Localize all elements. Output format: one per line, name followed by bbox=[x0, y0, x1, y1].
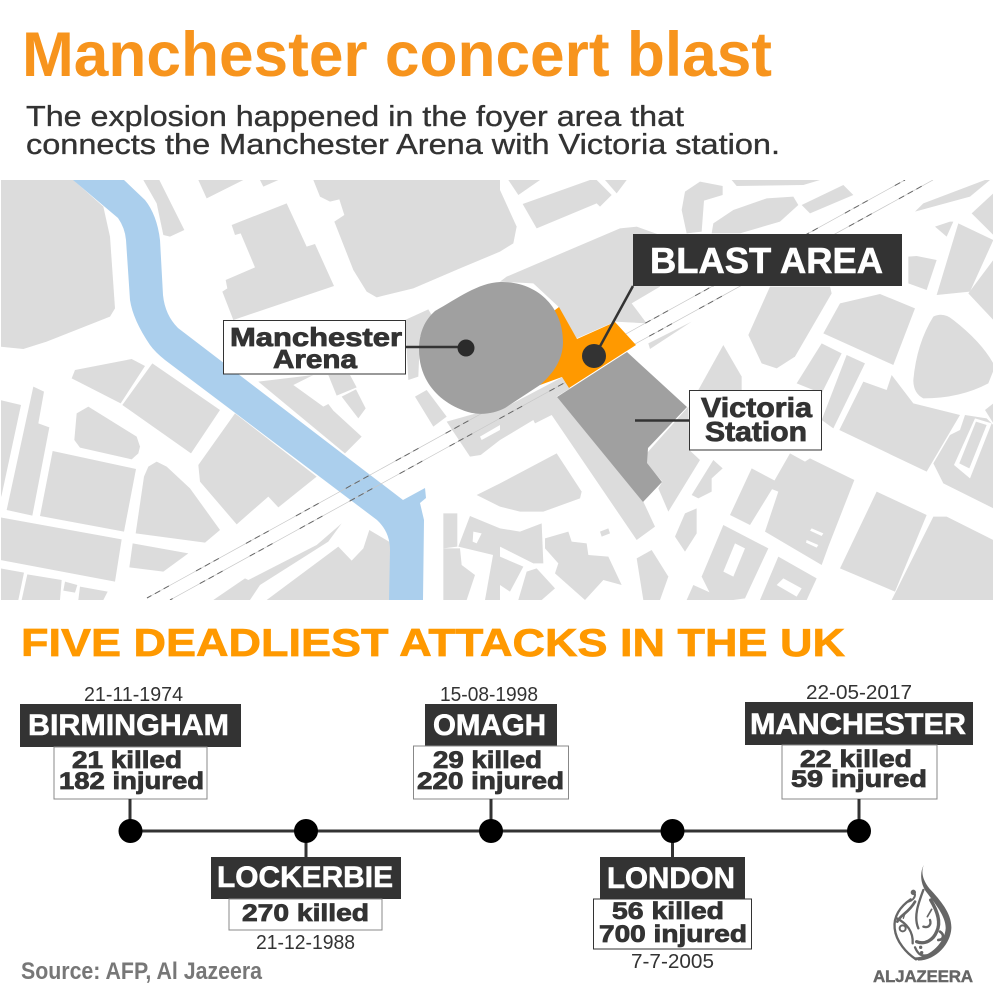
event: Omagh: 15-08-1998 bbox=[440, 684, 538, 706]
event: London: 700 injured bbox=[599, 921, 747, 948]
label: BLAST AREA bbox=[633, 234, 902, 286]
event: London bbox=[594, 819, 752, 973]
source: Source: AFP, Al Jazeera bbox=[21, 958, 263, 985]
railway lines bbox=[147, 180, 933, 600]
manchester arena building bbox=[419, 282, 563, 414]
title: Manchester concert blast bbox=[22, 20, 772, 90]
event: Omagh: OMAGH bbox=[433, 709, 546, 742]
label: Manchester Arena: Manchester bbox=[230, 322, 402, 352]
victoria station building bbox=[557, 352, 687, 502]
logo: Al Jazeera bbox=[873, 865, 973, 986]
event: Birmingham bbox=[20, 684, 241, 843]
victoria leader bbox=[635, 419, 689, 422]
event: Lockerbie bbox=[211, 819, 401, 954]
event: Omagh: 220 injured bbox=[417, 768, 564, 795]
map bbox=[0, 180, 997, 600]
event: Birmingham: 182 injured bbox=[59, 768, 204, 795]
label: Victoria Station bbox=[690, 390, 822, 450]
event: Manchester: 22 killed bbox=[800, 746, 912, 773]
event: Lockerbie: 270 killed bbox=[242, 900, 369, 927]
label: Manchester Arena bbox=[224, 320, 406, 374]
blast leader and marker bbox=[582, 286, 633, 368]
river bbox=[73, 180, 426, 600]
arena leader bbox=[405, 340, 474, 356]
timeline line bbox=[130, 830, 859, 832]
label: Manchester Arena: Arena bbox=[273, 344, 358, 374]
map: buildings left half bbox=[0, 180, 500, 600]
map: buildings right half bbox=[500, 180, 997, 600]
event: Omagh bbox=[414, 684, 568, 843]
section heading: FIVE DEADLIEST ATTACKS IN THE UK bbox=[21, 622, 845, 665]
label: BLAST AREA: BLAST AREA bbox=[650, 240, 883, 281]
logo: Al Jazeera: ALJAZEERA bbox=[873, 967, 973, 986]
event: Birmingham: 21 killed bbox=[72, 747, 182, 774]
event: Manchester: MANCHESTER bbox=[750, 708, 966, 741]
event: Manchester bbox=[745, 682, 973, 843]
blast area bbox=[540, 307, 636, 388]
label: Victoria Station: Victoria bbox=[701, 392, 812, 423]
event: London: LONDON bbox=[607, 862, 735, 895]
event: Birmingham: BIRMINGHAM bbox=[28, 709, 229, 742]
event: Birmingham: 21-11-1974 bbox=[84, 684, 183, 706]
label: Victoria Station: Station bbox=[705, 416, 807, 447]
event: Lockerbie: LOCKERBIE bbox=[217, 861, 393, 894]
event: Lockerbie: 21-12-1988 bbox=[256, 932, 355, 954]
event: Manchester: 59 injured bbox=[791, 766, 927, 793]
subtitle: The explosion happened in the foyer area that bbox=[26, 101, 684, 133]
event: Omagh: 29 killed bbox=[433, 747, 542, 774]
event: London: 56 killed bbox=[612, 898, 724, 925]
subtitle: connects the Manchester Arena with Victoria station. bbox=[26, 129, 780, 161]
subtitle bbox=[26, 101, 780, 161]
event: Manchester: 22-05-2017 bbox=[806, 682, 912, 704]
event: London: 7-7-2005 bbox=[631, 951, 714, 973]
